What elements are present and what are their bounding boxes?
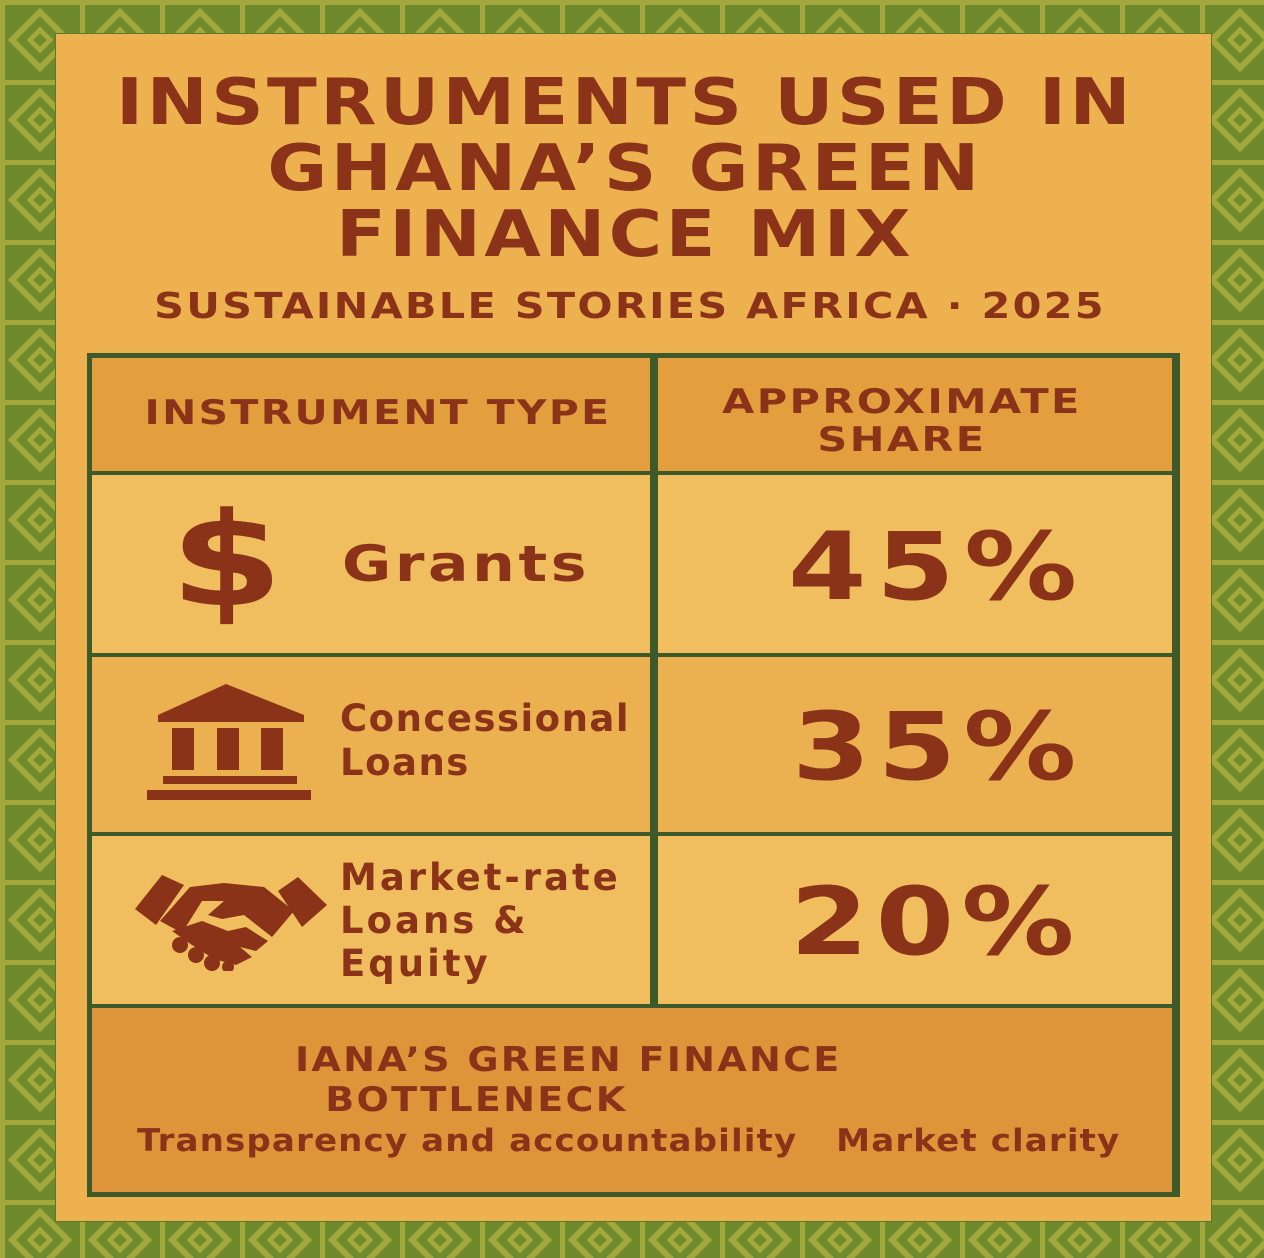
value: 45%: 45%: [788, 513, 1087, 622]
icon: bank: [147, 684, 311, 800]
label: concessional loans: Concessional: [340, 697, 630, 740]
value: 35%: [658, 657, 1172, 832]
row: market-rate: [92, 836, 650, 1004]
value: 45%: [658, 475, 1172, 653]
label: concessional loans: Loans: [340, 741, 470, 784]
icon: dollar: $: [170, 484, 283, 636]
footer: bottleneck: [92, 1008, 1172, 1192]
label: market-rate loans & equity: Equity: [340, 942, 491, 985]
header: approximate share: APPROXIMATE: [722, 382, 1082, 422]
footer heading: [295, 1040, 842, 1120]
title: GHANA’S GREEN: [267, 132, 983, 206]
subtitle: SUSTAINABLE STORIES AFRICA · 2025: [154, 286, 1106, 327]
label: market-rate loans & equity: [340, 856, 621, 985]
footer text: Transparency and accountability Market clarity: [137, 1123, 1120, 1159]
label: grants: Grants: [342, 535, 590, 593]
title: FINANCE MIX: [336, 198, 914, 272]
row: concessional loans: [92, 657, 650, 832]
footer heading: IANA’S GREEN FINANCE: [295, 1040, 842, 1080]
value: 20%: 20%: [790, 868, 1082, 977]
header: approximate share: [658, 358, 1172, 471]
header: instrument type: [92, 358, 650, 471]
row: grants: [92, 475, 650, 653]
icon: handshake: [135, 875, 327, 971]
value: 35%: 35%: [792, 693, 1084, 802]
footer heading: BOTTLENECK: [325, 1080, 627, 1120]
header: instrument type: INSTRUMENT TYPE: [145, 393, 611, 433]
title: [116, 66, 1134, 272]
label: concessional loans: [340, 697, 630, 784]
table: [87, 353, 1180, 1197]
header: approximate share: SHARE: [817, 420, 987, 460]
title: INSTRUMENTS USED IN: [116, 66, 1134, 140]
label: market-rate loans & equity: Loans &: [340, 899, 528, 942]
label: market-rate loans & equity: Market-rate: [340, 856, 621, 899]
value: 20%: [658, 836, 1172, 1004]
